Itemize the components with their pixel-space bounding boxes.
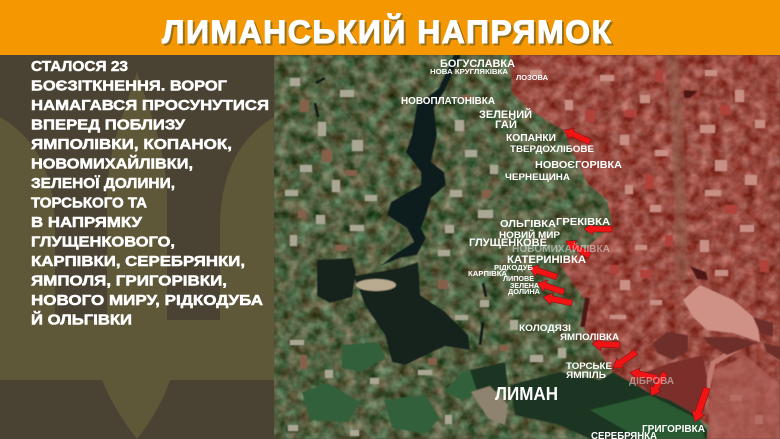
river [380,55,461,266]
lower-right red [707,355,780,439]
map labels: КОЛОДЯЗІ [519,323,571,333]
header band [0,0,780,55]
map labels: НОВОЄГОРІВКА [535,159,622,171]
pale chalk area [683,285,760,342]
map labels: ГРИГОРІВКА [642,424,705,435]
panel: left text background [0,55,275,439]
map labels: ОЛЬГІВКА [500,218,556,230]
map labels: ЛИМАН [495,384,558,404]
title: ЛИМАНСЬКИЙ НАПРЯМОК [162,14,611,50]
arrow: Lypove [535,277,566,298]
map labels: ЯМПІЛЬ [566,370,606,381]
map labels: ЗЕЛЕНИЙ [479,108,532,121]
forest: green lower left [302,342,482,434]
text block: situation summary: ЯМПОЛІВКИ, КОПАНОК, [31,137,232,153]
map labels: ГРЕКІВКА [556,216,610,228]
valley in red zone [672,55,682,280]
map labels: ЗЕЛЕНА [510,283,539,290]
map labels: ГАЙ [495,118,517,131]
arrow: Torske [610,347,639,373]
map labels: ДОЛИНА [508,289,540,296]
arrow: Hryhorivka [688,386,714,424]
map labels: ТОРСЬКЕ [566,361,612,372]
icon: trident watermark [0,72,274,439]
text block: situation summary: ЯМПОЛЯ, ГРИГОРІВКИ, [31,274,227,290]
text block: situation summary: НОВОГО МИРУ, РІДКОДУБА [31,293,264,309]
green-zone pale fields [285,78,566,436]
arrow: Novomykhailivka [563,236,593,261]
arrow: Hrekivka [584,223,612,235]
arrow: Ridkodub [527,262,559,283]
map labels: НОВОПЛАТОНІВКА [401,96,495,107]
text block: situation summary: ВПЕРЕД ПОБЛИЗУ [31,118,186,134]
text block: situation summary [31,59,269,328]
map labels: НОВОМИХАЙЛІВКА [512,242,610,255]
map labels: ГЛУЩЕНКОВЕ [469,237,547,249]
sand: Lyman [471,386,508,425]
text block: situation summary: ТОРСЬКОГО ТА [31,196,148,212]
text block: situation summary: ЗЕЛЕНОЇ ДОЛИНИ, [31,175,175,192]
occupied territory: red zone [510,55,780,439]
arrow: Yampolivka [592,338,620,351]
text block: situation summary: НАМАГАВСЯ ПРОСУНУТИСЯ [31,98,269,114]
text block: situation summary: СТАЛОСЯ 23 [31,59,128,75]
text block: situation summary: БОЄЗІТКНЕННЯ. ВОРОГ [31,78,227,94]
map labels: БОГУСЛАВКА [440,58,515,70]
arrow: Yampil [629,366,658,384]
text block: situation summary: НОВОМИХАЙЛІВКИ, [31,154,193,172]
map: satellite terrain [274,55,780,439]
text block: situation summary: КАРПІВКИ, СЕРЕБРЯНКИ, [31,254,245,270]
text block: situation summary: ГЛУЩЕНКОВОГО, [31,234,175,250]
map labels: ДІБРОВА [629,376,674,387]
map labels: НОВА КРУГЛЯКІВКА [430,67,509,76]
title: ЛИМАНСЬКИЙ НАПРЯМОК [164,16,613,52]
map labels: ТВЕРДОХЛІБОВЕ [510,144,594,155]
dark red forest [630,355,707,413]
map labels: ЯМПОЛІВКА [560,332,620,342]
arrow: Kopanky [561,125,592,147]
map labels: ЧЕРНЕЩИНА [505,172,570,183]
arrow: Dibrova [646,370,670,399]
map labels: РІДКОДУБ [494,265,533,272]
map labels: КОПАНКИ [506,133,556,144]
arrows: attack directions [527,125,714,424]
map labels: ЛИПОВЕ [503,274,534,283]
map labels: ЛОЗОВА [516,73,549,82]
map labels: НОВИЙ МИР [499,229,561,241]
map labels [401,58,705,439]
red-zone pale fields [530,70,765,424]
text block: situation summary: Й ОЛЬГІВКИ [31,310,132,328]
forest: dark patches around Lyman [470,362,707,439]
forest: central dark massif [317,258,470,365]
sand patch [356,279,396,291]
map labels: КАТЕРИНІВКА [507,254,586,266]
text block: situation summary: В НАПРЯМКУ [31,215,143,231]
map labels: КАРПІВКА [468,271,507,278]
arrow: Zelena Dolyna [542,291,573,309]
